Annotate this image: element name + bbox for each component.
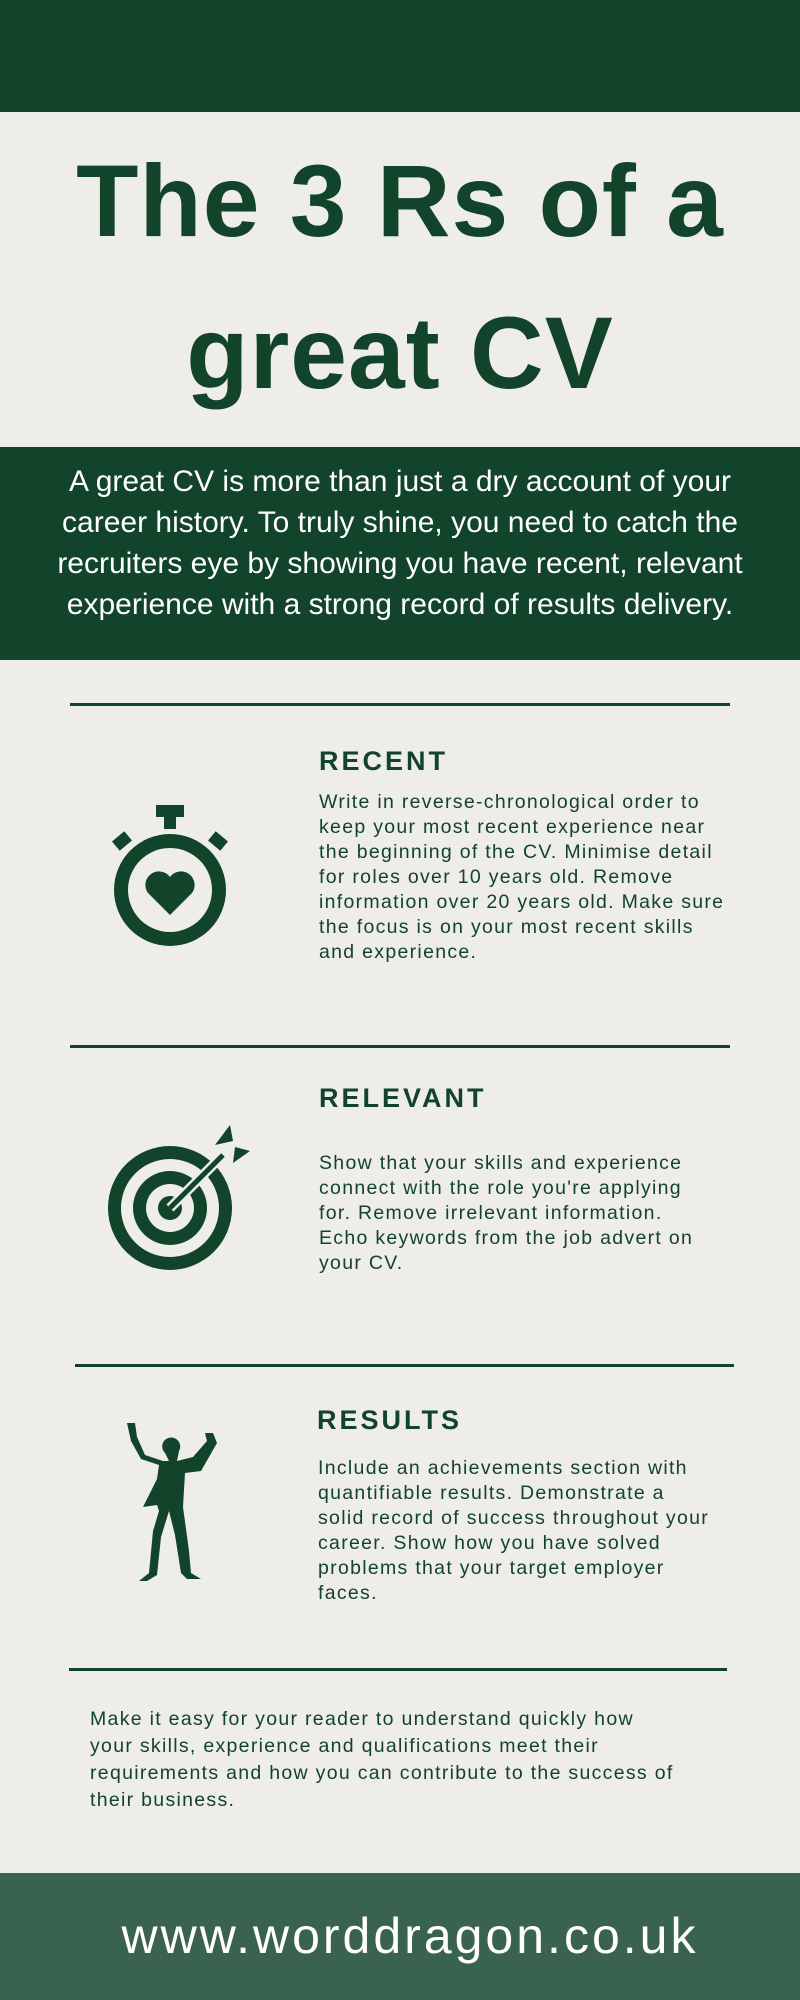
title: great CV [186,296,614,410]
icon: person celebrating [127,1423,217,1581]
footer bar [0,1873,800,2000]
intro band: career history. To truly shine, you need to catch the [62,506,738,539]
closing text: Make it easy for your reader to understand quickly how your skills, experience and qualifications meet their requirements and how you can contribute to the success of their business. [90,1708,674,1811]
icon: target [108,1125,250,1270]
title: The 3 Rs of a [76,144,724,258]
intro band: recruiters eye by showing you have recent, relevant [57,547,743,580]
text: results: Include an achievements section with quantifiable results. Demonstrate a solid record of success throughout your career. Show how you have solved problems that your target employer faces. [318,1457,709,1604]
icon: stopwatch [112,805,228,946]
intro band: A great CV is more than just a dry account of your [69,465,731,498]
footer bar: www.worddragon.co.uk [122,1908,698,1964]
intro band [0,447,800,660]
title [76,144,724,410]
intro band: experience with a strong record of results delivery. [67,588,733,621]
text: recent: Write in reverse-chronological order to keep your most recent experience near the beginning of the CV. Minimise detail for roles over 10 years old. Remove information over 20 years old. Make sure the focus is on your most recent skills and experience. [319,791,724,963]
heading: recent: RECENT [319,746,448,776]
text: relevant: Show that your skills and experience connect with the role you're applying for. Remove irrelevant information. Echo keywords from the job advert on your CV. [319,1152,693,1274]
top bar [0,0,800,112]
heading: relevant: RELEVANT [319,1083,487,1113]
heading: results: RESULTS [317,1405,462,1435]
